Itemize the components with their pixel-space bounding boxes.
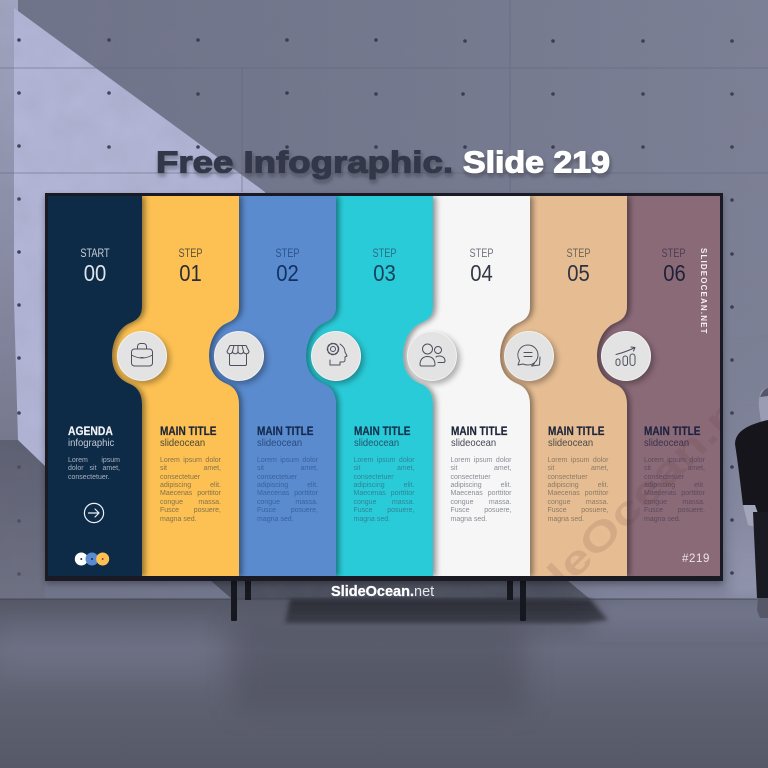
step label: STEP <box>469 248 494 260</box>
agenda text: consectetuer. <box>68 474 110 481</box>
body text: Maecenas porttitor <box>257 490 318 497</box>
title <box>156 146 612 184</box>
body text: adipiscing elit. <box>644 482 705 489</box>
title: Free Infographic. <box>156 146 453 180</box>
panel: step 03 <box>306 196 440 576</box>
brand footer: SlideOcean.net <box>331 584 434 600</box>
body text: magna sed. <box>644 516 681 523</box>
subtitle: slideocean <box>354 437 399 449</box>
panel: step 06 <box>597 196 720 576</box>
body text: Maecenas porttitor <box>354 490 414 497</box>
subtitle: slideocean <box>160 437 205 449</box>
body text: Lorem ipsum dolor <box>644 457 705 464</box>
person standing <box>735 388 768 618</box>
body text: sit amet, <box>548 465 608 472</box>
body text: Maecenas porttitor <box>160 490 221 497</box>
body text: Fusce posuere, <box>160 507 221 514</box>
icon: growth chart <box>600 331 650 381</box>
body text: Lorem ipsum dolor <box>548 457 608 464</box>
body text: sit amet, <box>257 465 318 472</box>
icon: head with gear <box>311 331 361 381</box>
body text: sit amet, <box>644 465 705 472</box>
subtitle: slideocean <box>257 437 302 449</box>
agenda text <box>68 456 120 481</box>
step label: STEP <box>178 248 203 260</box>
icon: arrow in circle <box>84 502 104 524</box>
body text: adipiscing elit. <box>548 482 608 489</box>
body text: consectetuer <box>450 474 491 481</box>
body text: magna sed. <box>257 516 294 523</box>
panel: step 02 <box>209 196 342 576</box>
icon: chat bubbles <box>504 331 554 381</box>
icon: logo dots <box>74 552 110 566</box>
icon: people <box>407 331 457 381</box>
watermark: SlideOcean.net <box>481 357 768 655</box>
TV screen with infographic columns <box>48 196 720 576</box>
TV frame <box>45 193 723 581</box>
body text: Lorem ipsum dolor <box>160 457 221 464</box>
main title: MAIN TITLE <box>160 426 216 438</box>
body text: consectetuer <box>644 474 684 481</box>
body text: sit amet, <box>450 465 512 472</box>
body text: Fusce posuere, <box>548 507 608 514</box>
icon: briefcase <box>117 331 167 381</box>
agenda text: dolor sit amet, <box>68 465 120 472</box>
agenda subtitle: infographic <box>68 437 114 449</box>
body text: Lorem ipsum dolor <box>354 457 414 464</box>
step number: 01 <box>179 260 202 286</box>
step number: 05 <box>567 260 590 286</box>
body text: sit amet, <box>354 465 414 472</box>
main title: MAIN TITLE <box>257 426 313 438</box>
body text: Fusce posuere, <box>354 507 414 514</box>
body text: adipiscing elit. <box>257 482 318 489</box>
step number: 02 <box>276 260 299 286</box>
panel: step 04 <box>403 196 537 576</box>
main title: MAIN TITLE <box>354 426 410 438</box>
main title: MAIN TITLE <box>450 426 507 438</box>
body text: adipiscing elit. <box>354 482 414 489</box>
body text: Maecenas porttitor <box>450 490 512 497</box>
step number: 03 <box>373 260 396 286</box>
body text <box>257 456 318 523</box>
step label: STEP <box>372 248 397 260</box>
body text: congue massa. <box>548 499 608 506</box>
TV stand legs <box>231 581 526 621</box>
icon: storefront <box>214 331 264 381</box>
body text: Maecenas porttitor <box>644 490 705 497</box>
body text: consectetuer <box>354 474 394 481</box>
body text: Maecenas porttitor <box>548 490 608 497</box>
body text: congue massa. <box>450 499 512 506</box>
title: Slide 219 <box>463 146 610 180</box>
body text: Lorem ipsum dolor <box>450 457 512 464</box>
body text <box>644 456 705 523</box>
body text: Fusce posuere, <box>644 507 705 514</box>
body text <box>160 456 221 523</box>
body text: congue massa. <box>257 499 318 506</box>
body text <box>354 456 414 523</box>
main title: MAIN TITLE <box>644 426 700 438</box>
vertical brand label: SLIDEOCEAN.NET <box>699 248 708 335</box>
start label: START <box>80 248 110 260</box>
agenda title: AGENDA <box>68 426 113 438</box>
body text: congue massa. <box>160 499 221 506</box>
body text: Lorem ipsum dolor <box>257 457 318 464</box>
step number: 06 <box>663 260 686 286</box>
body text: Fusce posuere, <box>257 507 318 514</box>
body text: magna sed. <box>160 516 197 523</box>
step label: STEP <box>566 248 591 260</box>
agenda text: Lorem ipsum <box>68 457 120 464</box>
step label: STEP <box>661 248 686 260</box>
body text: magna sed. <box>354 516 390 523</box>
subtitle: slideocean <box>644 437 689 449</box>
slide number: #219 <box>682 553 710 565</box>
panel: step 05 <box>500 196 633 576</box>
subtitle: slideocean <box>548 437 593 449</box>
step number: 04 <box>470 260 493 286</box>
body text: adipiscing elit. <box>160 482 221 489</box>
panel: step 01 <box>112 196 246 576</box>
body text: consectetuer <box>160 474 200 481</box>
body text: consectetuer <box>548 474 588 481</box>
body text: magna sed. <box>450 516 487 523</box>
body text: congue massa. <box>644 499 705 506</box>
body text <box>548 456 608 523</box>
body text: sit amet, <box>160 465 221 472</box>
panel: start column <box>48 196 149 576</box>
body text: Fusce posuere, <box>450 507 512 514</box>
body text: magna sed. <box>548 516 584 523</box>
main title: MAIN TITLE <box>548 426 604 438</box>
body text: consectetuer <box>257 474 297 481</box>
body text: congue massa. <box>354 499 414 506</box>
step label: STEP <box>275 248 300 260</box>
start number: 00 <box>84 260 106 286</box>
body text <box>450 456 512 523</box>
subtitle: slideocean <box>450 437 496 449</box>
body text: adipiscing elit. <box>450 482 512 489</box>
